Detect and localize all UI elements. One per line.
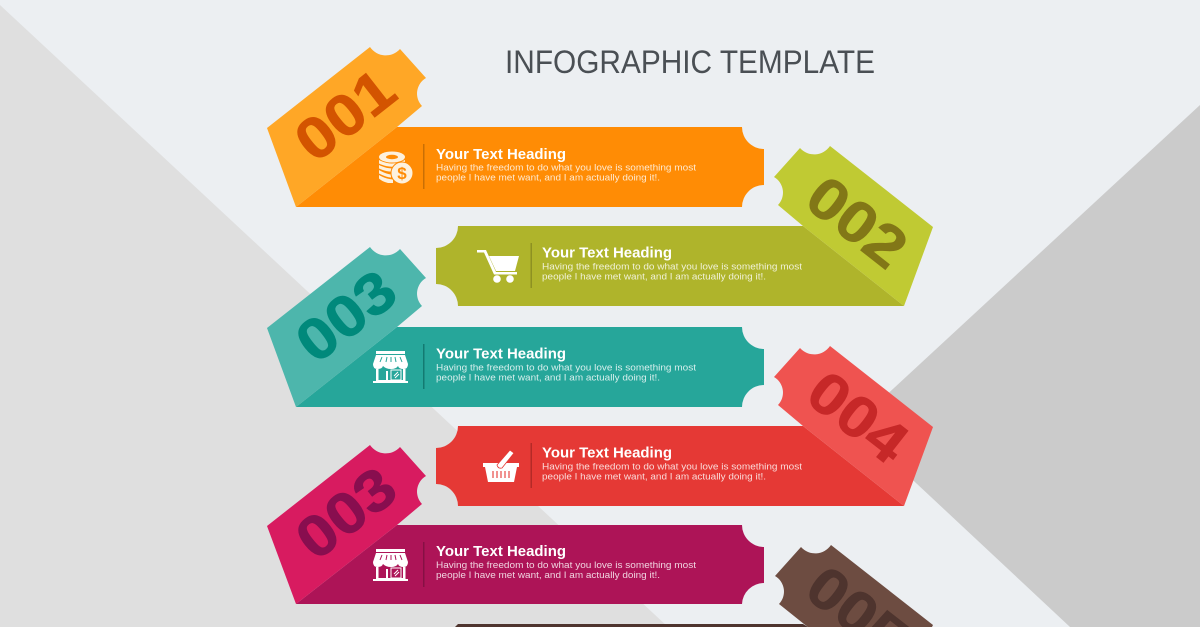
text block: people I have met want, and I am actually doing it!. [542,472,766,482]
text block: Your Text Heading [436,543,566,560]
text block: Having the freedom to do what you love is something most [542,462,802,472]
icon: store [373,549,408,581]
band 004 [436,426,904,506]
text block: Having the freedom to do what you love is something most [436,362,696,374]
number 001: 001 [283,57,408,175]
text block: Having the freedom to do what you love is something most [436,162,696,174]
divider [423,344,424,389]
divider [530,243,532,288]
number 004: 004 [795,359,920,477]
tag 005 [775,545,933,627]
band 002 [436,226,904,306]
tag 003 [267,247,426,407]
panel: ticket 005 brown (cropped) [455,545,933,627]
panel: ticket 002 [436,146,933,306]
text block: Your Text Heading [436,346,566,362]
divider [530,443,532,488]
tag 004 [774,346,933,506]
text block: people I have met want, and I am actually doing it!. [436,570,660,581]
text block: Your Text Heading [542,444,672,462]
text block [436,146,696,184]
number 002: 002 [794,164,919,282]
text block: people I have met want, and I am actually doing it!. [436,172,660,184]
panel: ticket 001 [267,47,764,207]
text block: people I have met want, and I am actually doing it!. [542,272,766,282]
icon: coins: $ [397,164,407,183]
title: INFOGRAPHIC TEMPLATE [505,44,875,80]
divider [423,144,424,189]
band 005 [455,624,808,627]
band 001 [296,127,764,207]
panel: ticket 004 [436,346,933,506]
icon: basket [483,450,519,482]
number 003: 003 [284,258,409,376]
band 003 magenta [296,525,764,604]
text block [436,543,696,581]
text block: Your Text Heading [436,146,566,163]
divider [423,542,424,587]
band 003 [296,327,764,407]
number 003 magenta: 003 [284,455,409,573]
tag 002 [774,146,933,306]
panel: ticket 003 magenta [267,445,764,604]
tag 001 [267,47,426,207]
text block: Having the freedom to do what you love is something most [542,262,802,272]
text block [436,346,696,384]
text block: Your Text Heading [542,244,672,262]
panel: ticket 003 teal [267,247,764,407]
text block: Having the freedom to do what you love is something most [436,560,696,571]
icon: cart [477,250,519,283]
text block [542,444,802,482]
text block: people I have met want, and I am actually doing it!. [436,372,660,384]
icon: store [373,351,408,383]
tag 003 magenta [267,445,426,604]
text block [542,244,802,282]
icon: coins [379,152,413,184]
